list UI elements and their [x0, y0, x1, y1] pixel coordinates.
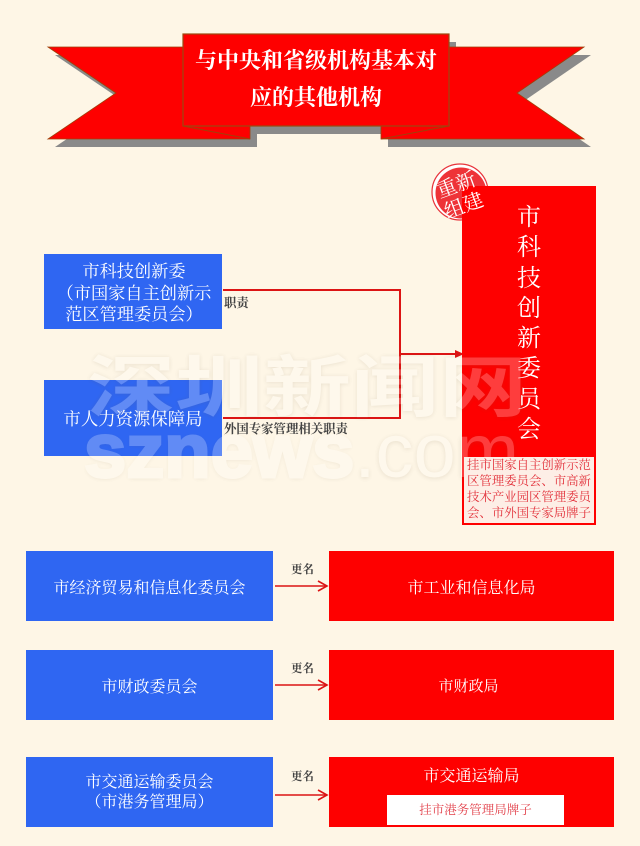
vertical name: 技 — [517, 266, 541, 292]
badge text: 重新 — [434, 167, 479, 203]
row: transport committee — [26, 757, 273, 827]
rename label 1: 更名 — [291, 564, 314, 576]
panel: transport bureau — [329, 757, 614, 827]
vertical name: 新 — [517, 326, 541, 352]
title text: 应的其他机构 — [250, 85, 382, 110]
panel: new science and technology committee — [462, 186, 596, 525]
plaque — [387, 795, 564, 825]
bureau name: 市交通运输局 — [423, 768, 520, 785]
row: industry bureau: 市工业和信息化局 — [407, 580, 536, 596]
vertical name: 市 — [517, 205, 541, 231]
plaque note: 会、市外国专家局牌子 — [467, 506, 591, 520]
badge: reorganized circle — [431, 163, 488, 221]
label: foreign expert duties: 外国专家管理相关职责 — [224, 422, 348, 436]
plaque note: 技术产业园区管理委员 — [467, 490, 591, 504]
watermark — [84, 350, 527, 494]
plaque note: 挂市国家自主创新示范 — [467, 458, 591, 472]
box: human resources bureau — [44, 380, 222, 456]
rename label 2: 更名 — [291, 663, 314, 675]
box: human resources bureau: 市人力资源保障局 — [63, 408, 203, 428]
box: science and technology committee: 市科技创新委 — [82, 262, 186, 281]
vertical name: 会 — [517, 417, 541, 443]
vertical name: 委 — [517, 356, 541, 382]
row: finance committee — [26, 650, 273, 720]
title banner — [46, 33, 591, 147]
watermark: 深圳新闻网 — [87, 350, 527, 425]
plaque note — [464, 457, 594, 523]
row: finance bureau — [329, 650, 614, 720]
badge text: 组建 — [441, 188, 487, 223]
row: finance bureau: 市财政局 — [438, 678, 498, 694]
vertical name: 创 — [517, 296, 541, 322]
watermark: sznews.com — [84, 409, 519, 494]
vertical name: 员 — [517, 387, 541, 413]
badge text — [434, 167, 487, 223]
row: economy committee — [26, 551, 273, 621]
title text — [195, 48, 437, 110]
box: science and technology committee — [44, 254, 222, 329]
rename label 3: 更名 — [291, 771, 314, 783]
plaque: 挂市港务管理局牌子 — [419, 803, 532, 817]
row: economy committee: 市经济贸易和信息化委员会 — [53, 580, 246, 596]
vertical name: 科 — [517, 235, 541, 261]
box: science and technology committee: （市国家自主创新示 — [57, 284, 211, 303]
box: science and technology committee: 范区管理委员会） — [65, 305, 203, 324]
row: transport committee: 市交通运输委员会 — [85, 774, 214, 791]
vertical name — [517, 204, 541, 443]
row: industry bureau — [329, 551, 614, 621]
row: finance committee: 市财政委员会 — [101, 678, 198, 696]
label: duties: 职责 — [224, 296, 249, 310]
row: transport committee: （市港务管理局） — [85, 794, 214, 811]
title text: 与中央和省级机构基本对 — [195, 48, 437, 73]
plaque note: 区管理委员会、市高新 — [467, 474, 591, 488]
